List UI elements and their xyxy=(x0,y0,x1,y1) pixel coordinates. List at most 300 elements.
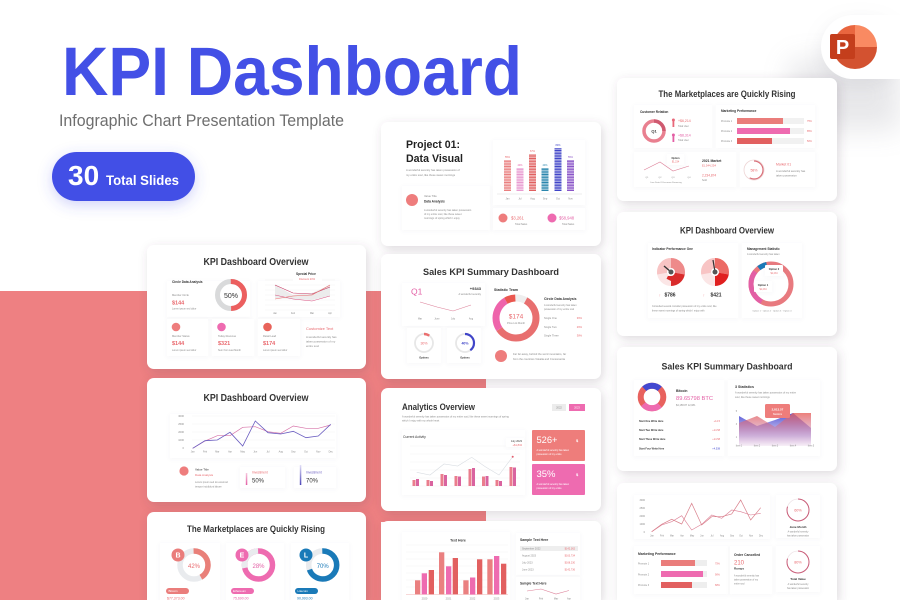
bitcoin panel: +4,538 xyxy=(712,448,721,450)
line chart: two series: Mar xyxy=(670,534,674,538)
sample text table: $142,362 xyxy=(565,548,576,550)
order cancelled: 210 xyxy=(734,560,745,566)
line chart: two series: 0 xyxy=(644,531,646,534)
metric: investment 50%: 50% xyxy=(252,478,265,484)
marketing performance bars: 90% xyxy=(715,574,721,576)
donut: ethereum 28%: E xyxy=(240,552,245,560)
customize text: A wonderful serenity has xyxy=(306,335,337,339)
customize text xyxy=(306,326,337,348)
line chart: monthly: Dec xyxy=(329,450,334,454)
ring: total value xyxy=(776,546,820,592)
metric card: 526+: possession of my entire xyxy=(536,453,562,456)
statistic team donut: Statistic Team xyxy=(494,288,518,292)
heading: The Marketplaces are Quickly Rising xyxy=(658,89,796,100)
marketing performance bars: Promote 2 xyxy=(638,574,650,576)
metric card: 526+: 526+ xyxy=(536,435,558,445)
ring: total value: has taken possession xyxy=(787,587,810,590)
line chart: two series: Sep xyxy=(730,536,735,538)
3 statistics area chart: Item 5 xyxy=(808,444,815,448)
ring: june month: 60% xyxy=(794,508,802,512)
metric card: 35%: A wonderful serenity has taken xyxy=(536,483,570,486)
market line panel xyxy=(634,152,736,187)
heading: Data Visual xyxy=(406,153,463,165)
line chart: monthly: Mar xyxy=(215,450,220,454)
line chart: monthly: 2000 xyxy=(178,430,185,434)
stat card: lead xyxy=(258,319,300,356)
panel: analytics overview slide xyxy=(381,388,601,511)
heading: Sales KPI Summary Dashboard xyxy=(423,267,559,278)
line chart: monthly: 1000 xyxy=(178,438,185,442)
marketing performance bars: Promote 1 xyxy=(638,562,650,566)
panel: sales KPI summary slide right xyxy=(617,347,837,471)
bar chart: striped: Sep xyxy=(543,198,548,200)
market ring panel: A wonderful serenity has xyxy=(776,169,806,173)
metric card: 35%: possession of my entire xyxy=(536,487,562,490)
data analysis panel xyxy=(402,186,490,230)
bar chart: striped: 80% xyxy=(555,144,561,147)
title: KPI Dashboard xyxy=(62,33,522,110)
management statistic donut: Option 2 xyxy=(769,267,780,271)
panel: sales KPI summary slide center xyxy=(381,254,601,379)
bitcoin panel: Start Four Write Here xyxy=(639,448,665,450)
line chart: two series: Apr xyxy=(680,534,684,538)
stat card: revenue: $321 xyxy=(218,341,230,347)
management statistic donut: Option 1 · Option 2 · Option 3 · Option 4 xyxy=(753,310,792,312)
indicator performance gauges: ↑ xyxy=(659,294,661,298)
sample text table: September 2022 xyxy=(522,548,541,550)
3 statistics area chart: 2,813.57 xyxy=(772,408,784,412)
ring: option 2: Options xyxy=(460,356,470,360)
metric card: 35% xyxy=(532,464,585,495)
note with icon xyxy=(495,350,566,362)
panel: KPI overview slide 1 xyxy=(147,245,366,369)
line chart: monthly: Sep xyxy=(291,450,296,454)
line chart: two series: Jul xyxy=(711,536,714,538)
ring: option 2 xyxy=(447,328,481,363)
bar chart: striped: 40% xyxy=(542,164,548,167)
donut: bitcoin 42%: 42% xyxy=(188,564,201,570)
grouped bar chart xyxy=(402,532,510,600)
metric card: 526+ xyxy=(532,430,585,461)
line chart: monthly: Oct xyxy=(304,450,308,454)
bitcoin panel: 89.65798 BTC xyxy=(676,396,713,402)
marketing performance bars: 85% xyxy=(807,130,813,133)
heading: KPI Dashboard Overview xyxy=(204,257,309,268)
sample text table: $168,230 xyxy=(565,562,576,564)
order cancelled: Rumps xyxy=(734,566,744,570)
badge: 30 total slides xyxy=(52,152,195,201)
market line panel: 2,234,874 xyxy=(702,174,716,178)
toggle buttons: 2023 xyxy=(574,406,580,410)
circle data analysis list: possession of my entire soul xyxy=(544,308,575,311)
data analysis panel: Data Analysis xyxy=(424,200,445,204)
indicator performance gauges: $421 xyxy=(710,292,722,298)
donut: litecoin 70%: L xyxy=(304,552,309,560)
line chart: monthly: Feb xyxy=(203,450,208,454)
circle data panel: Circle Data Analysis xyxy=(172,280,203,284)
Q1 line panel: A wonderful serenity xyxy=(458,293,482,296)
indicator performance gauges xyxy=(648,243,738,318)
sample text table: $163,734 xyxy=(565,554,576,558)
order cancelled xyxy=(730,546,772,594)
3 statistics area chart: 3 xyxy=(736,424,738,426)
marketing performance bars: Marketing Performance xyxy=(638,552,676,556)
marketing performance bars: 75% xyxy=(715,562,721,566)
customize text: taken possession of my xyxy=(306,340,336,344)
bitcoin panel: Bitcoin xyxy=(676,389,688,393)
donut: ethereum 28%: 28% xyxy=(252,564,265,570)
ring: june month: June Month xyxy=(790,525,807,529)
Q1 line panel: July xyxy=(451,318,456,320)
badge: 30 total slides: 30 xyxy=(68,160,99,191)
stat card: member: $144 xyxy=(172,341,185,347)
heading: Analytics Overview xyxy=(402,402,476,413)
chart: current activity: July 2023 xyxy=(511,439,523,443)
marketing performance bars: 68% xyxy=(715,584,721,587)
Q1 line panel xyxy=(402,283,485,326)
chart: current activity xyxy=(402,430,525,495)
statistic team donut xyxy=(494,288,536,338)
line chart: two series: Aug xyxy=(720,534,725,538)
heading: The Marketplaces are Quickly Rising xyxy=(187,524,325,535)
circle data analysis list: Single Three xyxy=(544,334,559,338)
line chart: monthly: 2500 xyxy=(178,422,185,426)
market line panel: $1,544,254 xyxy=(702,164,716,168)
bitcoin panel: $4,158.87 12,081 xyxy=(676,404,696,407)
grouped bar chart: Text Here xyxy=(450,538,466,542)
management statistic donut xyxy=(742,243,802,318)
market line panel: 2021 Market xyxy=(702,159,722,163)
data analysis note xyxy=(179,466,228,488)
chart: current activity: +$1,834 xyxy=(513,443,523,447)
line chart: special price: Discount 20% xyxy=(299,277,316,281)
bar chart: striped: Jul xyxy=(518,198,522,200)
3 statistics area chart: Item 3 xyxy=(772,444,779,448)
indicator performance gauges: Consulted several consider possession of my entire soul, like xyxy=(652,305,717,308)
data analysis note: Lorem ipsum sed do eiusmod xyxy=(195,481,228,484)
3 statistics area chart: 1 xyxy=(736,437,738,439)
customer relation panel: Total User xyxy=(678,125,689,128)
note with icon: Far far away, behind the word mountains, far xyxy=(513,352,566,356)
3 statistics area chart: 5 xyxy=(736,411,738,413)
stat card: lead: $174 xyxy=(263,341,276,347)
panel: marketplaces slide right xyxy=(617,78,837,201)
circle data panel: 50% xyxy=(224,293,238,300)
bitcoin panel xyxy=(634,380,724,456)
bar chart: striped xyxy=(493,140,585,205)
icon: PowerPoint logo on white tab: P xyxy=(836,37,849,59)
circle data analysis list: 38% xyxy=(577,334,583,338)
management statistic donut: Option 1 xyxy=(758,283,769,287)
stat card: member: Member Status xyxy=(172,334,190,338)
3 statistics area chart: Item 2 xyxy=(754,444,761,448)
market line panel: $1,234 xyxy=(672,160,680,164)
bar chart: striped: Oct xyxy=(556,198,560,200)
ring: total value: A wonderful serenity xyxy=(788,583,809,586)
market line panel: Q2 xyxy=(659,177,662,179)
intro text: my entire soul, like these sweet mornings xyxy=(406,173,456,177)
order cancelled: Order Cancelled xyxy=(734,553,760,557)
toggle buttons: 2022 xyxy=(556,406,562,410)
market line panel: Q1 xyxy=(646,177,649,179)
Q1 line panel: Mar xyxy=(418,318,422,320)
line chart: two series: May xyxy=(690,536,695,538)
market line panel: Option xyxy=(671,157,680,160)
donut: litecoin 70% xyxy=(291,543,349,600)
stat card: lead: Retail Lead xyxy=(263,334,277,338)
bar chart: striped: 40% xyxy=(517,164,523,167)
Q1 line panel: June xyxy=(434,318,440,320)
coral background band xyxy=(0,291,486,600)
sample text table: Sample Text Here xyxy=(520,538,548,542)
bar chart: striped: 55% xyxy=(505,156,511,159)
icon: PowerPoint logo on white tab xyxy=(790,15,900,130)
metric: investment 70%: 70% xyxy=(306,478,319,484)
intro text xyxy=(406,168,460,177)
customize text: Customize Text xyxy=(306,326,334,331)
market ring panel: 58% xyxy=(750,168,758,172)
line chart: two series xyxy=(634,495,770,539)
order cancelled: taken possession of my xyxy=(734,578,759,582)
customer relation panel xyxy=(634,105,712,148)
donut: bitcoin 42%: B xyxy=(175,552,181,560)
indicator performance gauges: these sweet mornings of spring which I enjoy with xyxy=(652,310,705,312)
heading: KPI Dashboard Overview xyxy=(204,393,309,404)
market line panel: Sold xyxy=(702,179,707,182)
Q1 line panel: Q1 xyxy=(411,286,423,296)
3 statistics area chart: Statistics xyxy=(773,413,783,416)
circle data panel xyxy=(167,280,250,317)
marketing performance bars: Marketing Performance xyxy=(721,109,757,113)
donut: ethereum 28%: Ethereum xyxy=(233,589,247,593)
metric: investment 70%: Investment xyxy=(306,470,322,474)
circle data panel: Member Circle xyxy=(172,293,189,297)
bitcoin panel: Start Two Write Here xyxy=(639,429,664,432)
ring: option 1: Options xyxy=(419,356,429,360)
panel: marketplaces slide left xyxy=(147,512,366,600)
line chart: special price: Apr xyxy=(328,312,332,315)
customer relation panel: +$6,214 xyxy=(678,119,691,123)
sample text table: July 2023 xyxy=(522,562,533,564)
marketing performance bars xyxy=(634,546,728,594)
marketing performance bars xyxy=(716,105,815,148)
sample text table: June 2023 xyxy=(522,568,534,572)
totals panel: Total Sales xyxy=(562,223,575,226)
sample text table: $142,736 xyxy=(565,568,576,572)
bar chart: striped: Aug xyxy=(530,198,535,200)
subtitle: Infographic Chart Presentation Template xyxy=(59,112,344,130)
bitcoin panel: +14.58 xyxy=(712,429,721,432)
line chart: special price: Feb xyxy=(291,312,296,315)
marketing performance bars: Promote 2 xyxy=(721,130,733,133)
line chart: monthly: Jan xyxy=(191,450,195,454)
data analysis panel: Value Title xyxy=(424,194,437,198)
line chart: two series: Feb xyxy=(660,536,665,538)
metric: investment 70% xyxy=(294,465,336,488)
stat card: member xyxy=(167,319,208,356)
panel: KPI overview slide right xyxy=(617,212,837,336)
line chart: two series: Oct xyxy=(739,534,743,538)
3 statistics area chart xyxy=(728,380,820,456)
circle data panel: $144 xyxy=(172,300,185,306)
3 statistics area chart: 3 Statistics xyxy=(735,385,754,389)
donut: bitcoin 42% xyxy=(160,543,220,600)
ring: option 1: 30% xyxy=(420,342,428,346)
line chart: two series: Jun xyxy=(700,536,705,538)
metric card: 35%: 35% xyxy=(536,469,556,479)
market ring panel: taken possession xyxy=(776,174,797,178)
totals panel: $58,948 xyxy=(559,216,575,220)
data analysis panel: of my entire soul, like these sweet xyxy=(424,213,462,216)
line chart: monthly xyxy=(170,414,336,458)
indicator performance gauges: $786 xyxy=(664,292,676,298)
circle data analysis list: Circle Data Analysis xyxy=(544,297,577,301)
data analysis panel: mornings of spring which I enjoy xyxy=(424,217,460,220)
donut: litecoin 70%: Litecoin xyxy=(298,589,308,593)
line chart: special price xyxy=(258,271,340,317)
data analysis note: tempor incididunt labore xyxy=(195,486,222,488)
ring: option 1 xyxy=(407,328,441,363)
heading xyxy=(406,139,463,165)
indicator performance gauges: Indicator Performance One xyxy=(652,247,693,251)
data analysis panel: A wonderful serenity has taken possession xyxy=(424,209,472,212)
circle data analysis list: 36% xyxy=(577,316,583,320)
3 statistics area chart: Item 4 xyxy=(790,444,797,448)
market line panel: Line Data Of Increase Financing xyxy=(650,181,682,184)
ring: june month: has taken possession xyxy=(787,534,810,538)
marketing performance bars: 50% xyxy=(807,140,813,143)
circle data analysis list: Single Two xyxy=(544,325,557,329)
line chart: two series: 2500 xyxy=(639,507,646,510)
bar chart: striped: 67% xyxy=(530,150,536,153)
chart: current activity: Current Activity xyxy=(403,435,426,439)
panel: KPI overview slide 2 xyxy=(147,378,366,502)
ring: option 2: 40% xyxy=(461,342,469,346)
customer relation panel: +$8,314 xyxy=(678,134,691,138)
management statistic donut: A wonderful serenity has taken xyxy=(747,253,780,256)
panel: line chart and performance slide xyxy=(617,483,837,600)
donut: litecoin 70%: 70% xyxy=(317,564,329,570)
intro text: which I enjoy with my whole heart xyxy=(402,420,440,422)
circle data analysis list xyxy=(544,297,583,338)
totals panel: Total Sales xyxy=(515,223,528,226)
panel: project data visual slide xyxy=(381,122,601,246)
market ring panel: Market 01 xyxy=(776,162,791,166)
donut: ethereum 28% xyxy=(226,543,284,600)
ring: total value: 80% xyxy=(794,560,802,564)
market line panel: Q4 xyxy=(688,177,691,179)
line chart: monthly: Jun xyxy=(253,450,258,454)
order cancelled: A wonderful serenity has xyxy=(734,574,760,578)
bitcoin panel: Start Three Write Here xyxy=(639,438,666,441)
market ring panel xyxy=(740,152,815,187)
stat card: revenue: Sum from Last Month xyxy=(218,349,242,352)
stat card: revenue: Today Revenue xyxy=(218,334,237,338)
3 statistics area chart: soul, like these sweet mornings xyxy=(735,396,770,399)
line chart: monthly: Apr xyxy=(228,450,232,454)
market line panel: Q3 xyxy=(672,177,675,179)
circle data analysis list: Single One xyxy=(544,316,557,320)
customer relation panel: Customer Relation xyxy=(640,110,668,114)
heading: Sales KPI Summary Dashboard xyxy=(662,362,793,372)
indicator performance gauges: ↑ xyxy=(703,294,705,298)
sample line chart xyxy=(516,577,580,600)
marketing performance bars: Promote 3 xyxy=(638,584,650,587)
line chart: two series: 1000 xyxy=(639,523,646,526)
metric card: 526+: A wonderful serenity has taken xyxy=(536,449,570,452)
line chart: special price: Special Price xyxy=(296,272,316,276)
customer relation panel: Total User xyxy=(678,139,689,142)
circle data panel: Lorem ipsum sed dolor xyxy=(172,308,197,310)
management statistic donut: $1,234 xyxy=(759,289,767,291)
circle data analysis list: A wonderful serenity has taken xyxy=(544,304,577,307)
bitcoin panel: +14.5 xyxy=(714,420,721,423)
bar chart: striped: Jan xyxy=(505,198,510,200)
stat card: member: Lorem ipsum sed dolor xyxy=(172,349,197,352)
marketing performance bars: 75% xyxy=(807,120,813,123)
sample text table xyxy=(516,533,580,575)
sample text table: August 2023 xyxy=(522,554,537,558)
line chart: two series: Jan xyxy=(650,536,655,538)
statistic team donut: Price List Month xyxy=(507,322,526,325)
data analysis note: Data Analysis xyxy=(195,473,214,477)
management statistic donut: Management Statistic xyxy=(747,247,780,251)
customer relation panel: Q1 xyxy=(651,128,657,134)
stat card: revenue xyxy=(212,319,254,356)
line chart: two series: 3000 xyxy=(639,499,646,502)
line chart: monthly: Jul xyxy=(266,450,270,454)
stat card: lead: Lorem ipsum sed dolor xyxy=(263,349,288,352)
3 statistics area chart: Item 1 xyxy=(736,444,743,448)
order cancelled: entire soul xyxy=(734,582,745,586)
intro text xyxy=(402,416,509,422)
management statistic donut: $1,234 xyxy=(770,273,778,275)
toggle buttons xyxy=(552,404,585,411)
line chart: monthly: 0 xyxy=(183,446,185,450)
intro text: A wonderful serenity has taken possession of xyxy=(406,168,460,172)
line chart: two series: Dec xyxy=(759,536,764,538)
circle data analysis list: 26% xyxy=(577,325,583,329)
metric: investment 50%: Investment xyxy=(252,470,268,474)
marketing performance bars: Promote 3 xyxy=(721,140,733,143)
bar chart: striped: Nov xyxy=(568,198,573,200)
metric: investment 50% xyxy=(240,467,285,488)
line chart: two series: 2000 xyxy=(639,515,646,518)
line chart: special price: Mar xyxy=(310,312,314,315)
heading: KPI Dashboard Overview xyxy=(680,226,775,236)
Q1 line panel: +9343 xyxy=(470,286,482,291)
bar chart: striped: 55% xyxy=(568,156,574,159)
heading: Project 01: xyxy=(406,139,460,151)
Q1 line panel: Aug xyxy=(469,318,474,320)
line chart: monthly: Nov xyxy=(316,450,321,454)
totals panel: $3,261 xyxy=(511,216,524,220)
ring: june month xyxy=(776,495,820,538)
note with icon: from the countries Vokalia and Consonantia xyxy=(513,357,565,361)
line chart: monthly: Aug xyxy=(279,450,283,454)
badge: 30 total slides: Total Slides xyxy=(106,172,179,188)
customize text: entire soul xyxy=(306,344,319,348)
metric card: 526+: $ xyxy=(576,438,579,443)
panel: bar chart slide xyxy=(381,521,601,600)
ring: june month: A wonderful serenity xyxy=(788,530,809,534)
line chart: monthly: 3000 xyxy=(178,414,185,418)
bitcoin panel: Start One Write Here xyxy=(639,420,664,423)
ring: total value: Total Value xyxy=(790,577,806,581)
data analysis note: Value Title xyxy=(195,468,209,472)
line chart: monthly: May xyxy=(240,450,246,454)
bitcoin panel: +14.58 xyxy=(712,438,721,441)
